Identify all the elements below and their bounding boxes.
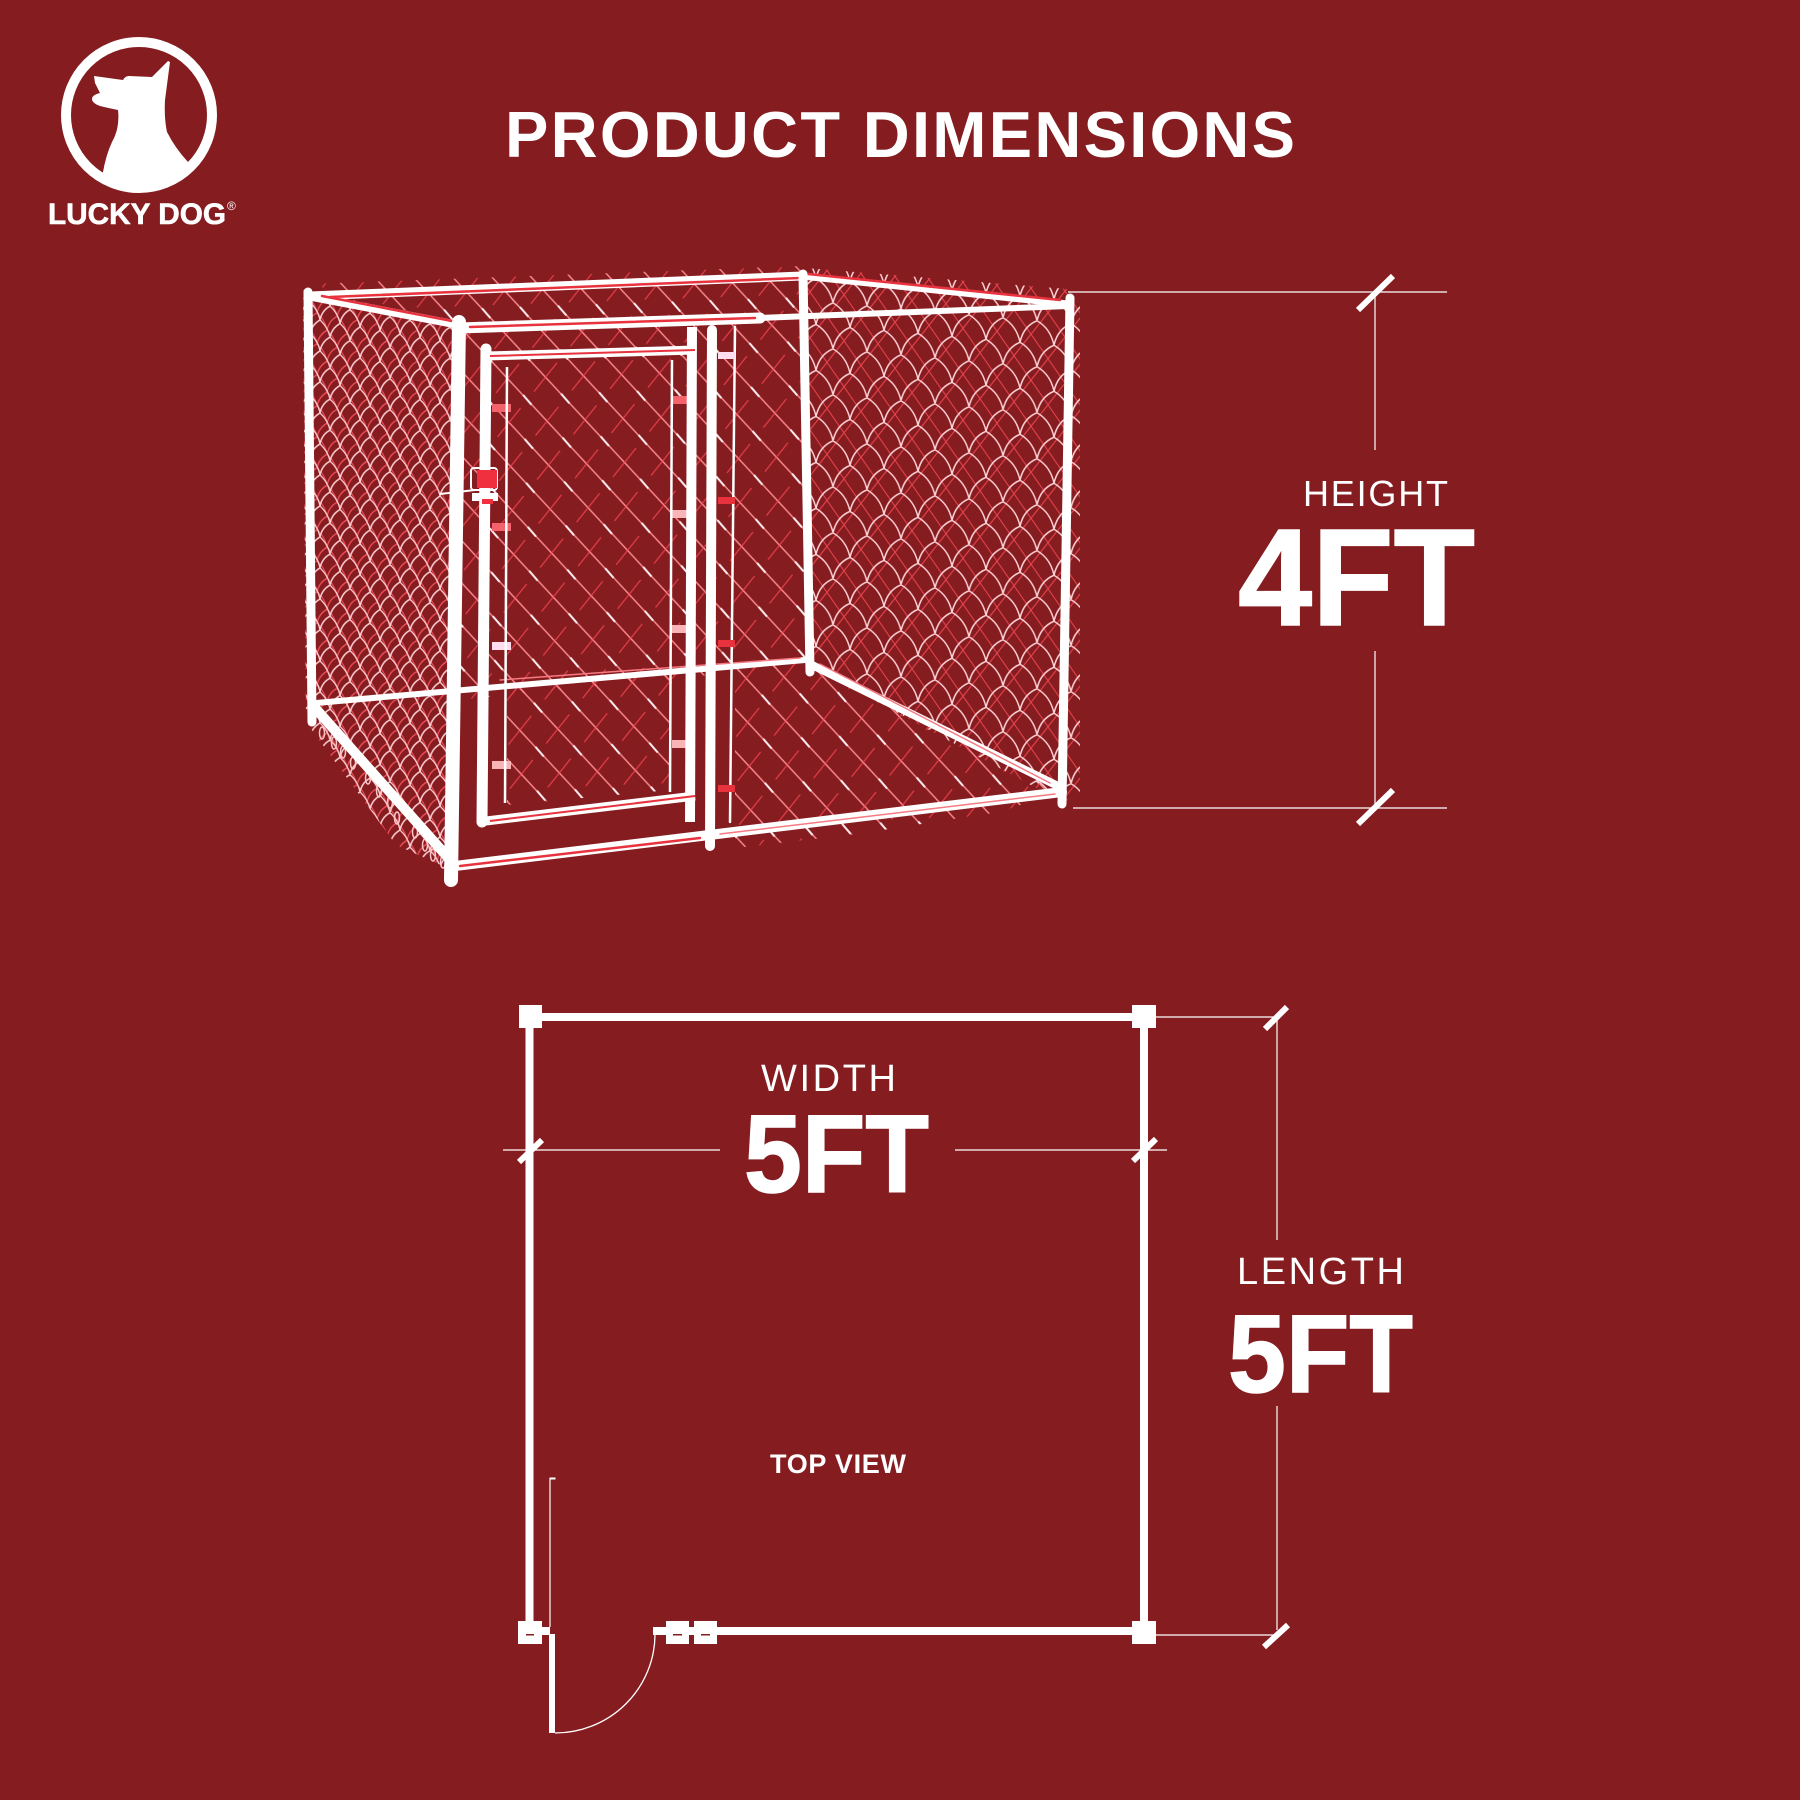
chain loops along lower left rail — [320, 727, 446, 868]
registered mark: ® — [227, 199, 236, 213]
top view label: TOP VIEW — [770, 1449, 907, 1479]
length label: LENGTH — [1237, 1251, 1404, 1293]
width dimension lines — [503, 1139, 1167, 1162]
height value: 4FT — [1238, 501, 1475, 655]
width value: 5FT — [744, 1093, 929, 1216]
back and floor mesh — [310, 266, 1058, 848]
door swing — [549, 1478, 655, 1733]
kennel illustration — [303, 266, 1080, 880]
side mesh: right panel — [806, 268, 1080, 805]
logo wordmark: LUCKY DOG — [48, 198, 226, 231]
side mesh: left panel — [303, 290, 459, 870]
plan corner posts — [518, 1005, 1156, 1644]
logo: Lucky Dog — [48, 42, 236, 231]
icon: dog silhouette — [92, 61, 192, 185]
top view plan — [518, 1005, 1156, 1733]
title: PRODUCT DIMENSIONS — [505, 98, 1295, 171]
kennel frame rails — [310, 274, 1068, 866]
door latch — [440, 468, 498, 504]
length value: 5FT — [1228, 1293, 1413, 1416]
width label: WIDTH — [761, 1058, 896, 1100]
door tabs under door frame — [492, 352, 735, 792]
height label: HEIGHT — [1303, 473, 1448, 514]
icon: ring — [66, 42, 212, 188]
plan walls — [526, 1013, 1148, 1635]
height dimension lines — [1068, 276, 1447, 824]
post notches — [526, 1634, 710, 1636]
kennel corner posts — [308, 274, 1070, 880]
length dimension lines — [1156, 1007, 1288, 1647]
kennel door — [482, 327, 695, 822]
